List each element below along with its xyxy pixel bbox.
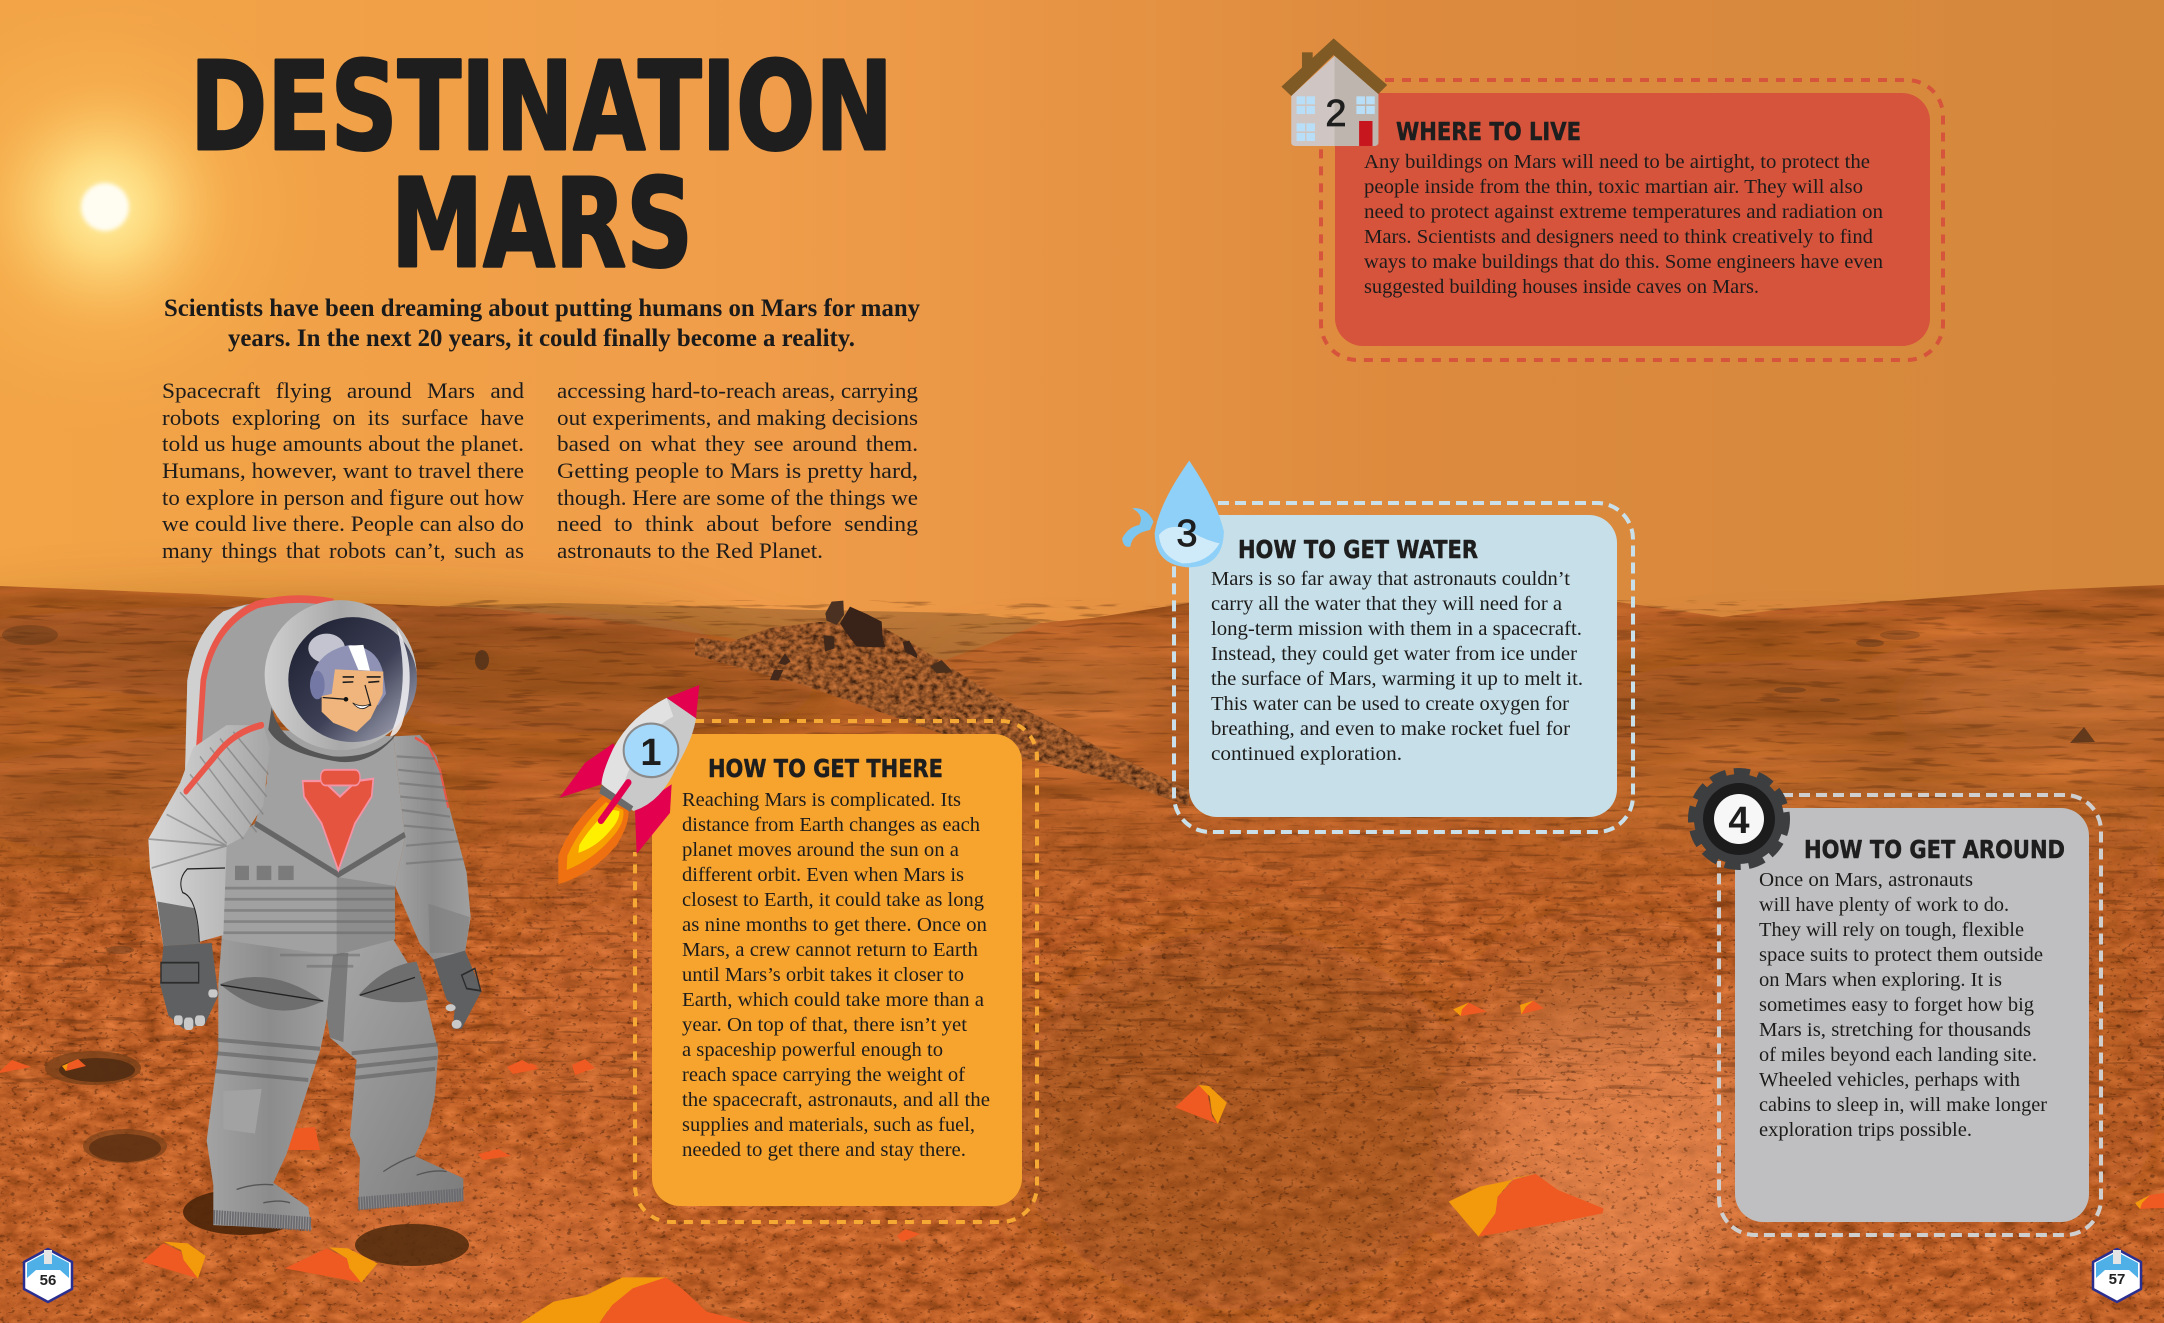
scattered marks on far slopes (2, 625, 2095, 954)
icon: house with number 2: 2 (1325, 93, 1347, 135)
shoulder red strip (186, 725, 262, 791)
panel 2 background (1335, 93, 1930, 346)
intro text: right column: though. Here are some of the things we (557, 485, 918, 510)
panel 1 body text: until Mars’s orbit takes it closer to (682, 964, 964, 986)
panel 2 heading: WHERE TO LIVE (1396, 117, 1581, 146)
thigh panels (220, 977, 323, 1011)
dark speckles (0, 780, 2164, 1323)
left fingertips (174, 989, 218, 1030)
subtitle: Scientists have been dreaming about putting humans on Mars for many (164, 295, 920, 322)
ground tone patches (0, 605, 2164, 1320)
panel 1 body text: needed to get there and stay there. (682, 1139, 966, 1161)
panel 2 body text: ways to make buildings that do this. Some engineers have even (1364, 251, 1883, 273)
knee bands (215, 1040, 438, 1080)
abdomen centre shade (337, 877, 395, 955)
panel 1 heading: HOW TO GET THERE (708, 754, 943, 783)
panel 1 body text: reach space carrying the weight of (682, 1064, 965, 1086)
right boot sole (358, 1195, 463, 1204)
panel 3 body text: long-term mission with them in a spacecraft. (1211, 618, 1582, 640)
intro text: left column (162, 378, 524, 563)
left leg (207, 939, 333, 1230)
icon: house with number 2 (1281, 38, 1387, 146)
panel 3 background (1189, 515, 1617, 817)
panel 1 body text: supplies and materials, such as fuel, (682, 1114, 975, 1136)
sky (0, 0, 2164, 700)
panel 1 body text: distance from Earth changes as each (682, 814, 980, 836)
panel 1 body text: Reaching Mars is complicated. Its (682, 789, 961, 811)
panel 4 body text: of miles beyond each landing site. (1759, 1044, 2037, 1066)
icon: wheel with number 4: 4 (1728, 800, 1750, 842)
left glove (160, 943, 218, 1029)
craters (45, 1051, 469, 1266)
panel 3 dashed border (1174, 503, 1633, 832)
panel 1 body text: the spacecraft, astronauts, and all the (682, 1089, 990, 1111)
panel 4 body text: cabins to sleep in, will make longer (1759, 1094, 2047, 1116)
panel 4 body text: Wheeled vehicles, perhaps with (1759, 1069, 2020, 1091)
boot creases (237, 1156, 447, 1203)
chest indicators (235, 866, 294, 880)
panel 1 body text: closest to Earth, it could take as long (682, 889, 984, 911)
thigh lines (221, 977, 415, 1001)
intro text: right column: based on what they see around them. (557, 431, 918, 456)
page number 57: 57 (2109, 1271, 2125, 1288)
ear cup (310, 671, 325, 699)
right shoulder red strip (415, 738, 448, 808)
subtitle: years. In the next 20 years, it could finally become a reality. (228, 325, 855, 352)
panel 2 body text: Any buildings on Mars will need to be airtight, to protect the (1364, 151, 1870, 173)
chest emblem top (321, 770, 360, 785)
shin patch (223, 1089, 262, 1134)
icon: water drop with number 3: 3 (1176, 513, 1198, 555)
panel 4 body text: They will rely on tough, flexible (1759, 919, 2024, 941)
sun (81, 183, 129, 231)
panel 4: how to get around (1719, 795, 2101, 1235)
panel 2 body text: people inside from the thin, toxic martian air. They will also (1364, 176, 1863, 198)
panel 4 body text: on Mars when exploring. It is (1759, 969, 2002, 991)
panel 1 body text (682, 789, 990, 1161)
panel 2 body text: suggested building houses inside caves on Mars. (1364, 276, 1759, 298)
intro text: left column: we could live there. People can also do (162, 511, 524, 536)
panel 3: how to get water (1174, 503, 1633, 832)
panel 1 body text: as nine months to get there. Once on (682, 914, 987, 936)
smile (353, 703, 371, 709)
panel 3 body text: continued exploration. (1211, 743, 1402, 765)
left glove strap (161, 963, 199, 983)
chest emblem (303, 779, 373, 870)
visor highlight (390, 627, 410, 736)
left boot sole (213, 1217, 312, 1224)
panel 4 body text: Mars is, stretching for thousands (1759, 1019, 2031, 1041)
panel 1 body text: Mars, a crew cannot return to Earth (682, 939, 978, 961)
visor (288, 617, 417, 742)
illustration: astronaut (148, 599, 482, 1230)
panel 2 body text: need to protect against extreme temperatures and radiation on (1364, 201, 1883, 223)
panel 3 body text: breathing, and even to make rocket fuel for (1211, 718, 1570, 740)
title: MARS (391, 153, 693, 295)
intro text: right column: need to think about before sending (557, 511, 918, 536)
icon: rocket with number 1: 1 (640, 732, 662, 774)
page number 57 (2093, 1249, 2141, 1302)
microphone (323, 697, 346, 699)
panel 2 body text: Mars. Scientists and designers need to think creatively to find (1364, 226, 1873, 248)
foreground rough soil (0, 780, 2164, 1323)
panel 2 dashed border (1321, 80, 1943, 360)
panel 3 body text: This water can be used to create oxygen for (1211, 693, 1569, 715)
torso (222, 730, 405, 955)
helmet cap (310, 645, 386, 705)
intro text: right column: accessing hard-to-reach areas, carrying (557, 378, 918, 403)
panel 3 body text: the surface of Mars, warming it up to melt it. (1211, 668, 1583, 690)
panel 1 body text: different orbit. Even when Mars is (682, 864, 964, 886)
distant hills (440, 603, 1100, 720)
right arm (393, 735, 471, 960)
right arm ribs (397, 756, 463, 864)
mic tip (344, 697, 348, 702)
panel 3 body text: Instead, they could get water from ice under (1211, 643, 1577, 665)
ground (0, 585, 2164, 1323)
subtitle (164, 295, 920, 352)
dark horizontal streaks (0, 600, 2164, 1100)
sun glow (0, 0, 330, 432)
intro text: right column: Getting people to Mars is pretty hard, (557, 458, 918, 483)
intro text: left column: robots exploring on its surface have (162, 405, 524, 430)
inner leg shading (327, 953, 348, 1042)
left forearm (157, 901, 200, 946)
neck ring shadow (268, 707, 398, 762)
intro text: left column: told us huge amounts about the planet. (162, 431, 524, 456)
title: DESTINATION (190, 36, 893, 178)
page number 56: 56 (40, 1272, 56, 1289)
abdomen ribs (222, 888, 395, 966)
panel 4 background (1735, 808, 2089, 1222)
right fingertips (446, 1004, 462, 1029)
panel 2: where to live (1321, 80, 1943, 360)
panel 2 body text (1364, 151, 1883, 298)
panel 3 body text: carry all the water that they will need for a (1211, 593, 1562, 615)
intro text: left column: many things that robots can’t, such as (162, 538, 524, 563)
cap stripe (348, 645, 370, 671)
panel 4 body text: sometimes easy to forget how big (1759, 994, 2034, 1016)
shoulder ribs (148, 732, 268, 868)
right leg (327, 939, 463, 1210)
panel 1 body text: Earth, which could take more than a (682, 989, 984, 1011)
panel 4 heading: HOW TO GET AROUND (1804, 835, 2065, 864)
rock pile (770, 601, 953, 681)
chest V seam (255, 823, 405, 875)
helmet ring (265, 600, 417, 750)
backpack (185, 600, 340, 792)
eyes and nose (343, 677, 381, 706)
icon: water drop with number 3 (1122, 461, 1224, 567)
panel 4 dashed border (1719, 795, 2101, 1235)
panel 1 dashed border (635, 721, 1037, 1222)
panel 1 body text: a spaceship powerful enough to (682, 1039, 943, 1061)
right glove detail (462, 968, 481, 991)
page number 56 (24, 1249, 72, 1302)
panel 4 body text: will have plenty of work to do. (1759, 894, 2009, 916)
orange rocks (0, 1001, 2164, 1323)
panel 1: how to get there (635, 721, 1037, 1222)
right forearm shade (428, 904, 470, 953)
intro text: right column: astronauts to the Red Planet. (557, 538, 823, 563)
panel 1 background (652, 734, 1022, 1206)
title (190, 36, 893, 295)
panel 3 body text: Mars is so far away that astronauts couldn’t (1211, 568, 1570, 590)
intro text: right column (557, 378, 918, 563)
panel 4 body text: space suits to protect them outside (1759, 944, 2043, 966)
intro text: left column: Humans, however, want to travel there (162, 458, 524, 483)
panel 1 body text: planet moves around the sun on a (682, 839, 959, 861)
icon: wheel with number 4 (1692, 772, 1786, 866)
backpack red stripe (199, 599, 333, 752)
rock pile slope (695, 622, 1189, 806)
panel 3 body text (1211, 568, 1583, 765)
left arm and shoulder (148, 725, 270, 946)
intro text: left column: to explore in person and figure out how (162, 485, 524, 510)
face (322, 669, 383, 732)
panel 3 heading: HOW TO GET WATER (1238, 535, 1478, 564)
arm cable (181, 868, 225, 942)
panel 4 body text: exploration trips possible. (1759, 1119, 1972, 1141)
icon: rocket with number 1 (558, 685, 699, 884)
right glove (433, 951, 482, 1029)
panel 4 body text: Once on Mars, astronauts (1759, 869, 1973, 891)
intro text: left column: Spacecraft flying around Mars and (162, 378, 524, 403)
panel 4 body text (1759, 869, 2047, 1141)
astronaut hair cap (308, 634, 345, 663)
panel 1 body text: year. On top of that, there isn’t yet (682, 1014, 967, 1036)
intro text: right column: out experiments, and making decisions (557, 405, 918, 430)
